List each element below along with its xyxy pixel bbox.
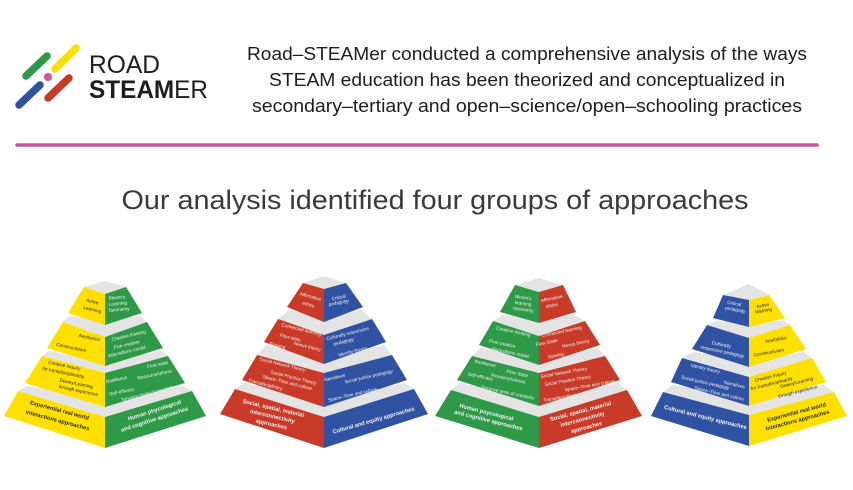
pyramid 4: cultural and experiential: pedagogy (725, 305, 746, 314)
pyramid 2: social and cultural: Narratives (324, 373, 346, 382)
header text block: Road–STEAMer conducted a comprehensive analysis of the ways (247, 44, 807, 64)
pyramid 1: experiential and cognitive: Learning (109, 300, 128, 307)
pyramid 1: experiential and cognitive: Dewey/Learning (59, 378, 94, 390)
pyramid 1: experiential and cognitive: for transdisciplinarity (42, 366, 85, 380)
pyramid 4: cultural and experiential: Social justice pedagogy (681, 375, 731, 391)
pyramid 1: experiential and cognitive: dispositions model (107, 345, 146, 358)
pyramid 1: experiential and cognitive: Learning (83, 305, 102, 314)
pyramid 3: cognitive and social: Resilience (474, 359, 497, 368)
pyramid 2: social and cultural (220, 276, 428, 448)
pyramid 1: experiential and cognitive: Flow state (147, 360, 169, 369)
pyramid 2: social and cultural: Connected learning (281, 322, 322, 337)
pyramid 3: cognitive and social: taxonomy (513, 306, 534, 313)
pyramid 3: cognitive and social: Human psycological (459, 403, 514, 423)
pyramid 2: social and cultural: ethics (302, 301, 316, 309)
section heading: Our analysis identified four groups of approaches (122, 185, 748, 215)
pyramid 1: experiential and cognitive: Active (86, 298, 100, 306)
pyramid 3: cognitive and social: Space–Time and culture (564, 379, 615, 392)
pyramid 2: social and cultural: Culturally responsive (326, 326, 370, 341)
pyramid 2: social and cultural: Space–Time and culture (327, 386, 378, 403)
pyramid 1: experiential and cognitive: Resourcefulness (137, 368, 173, 381)
pyramid 1: experiential and cognitive: Aesthetics (78, 333, 101, 342)
pyramid 3: cognitive and social: ethics (545, 302, 559, 309)
pyramid 2: social and cultural: Flow state (279, 333, 302, 343)
pyramid 1: experiential and cognitive: through experience (58, 384, 99, 397)
pyramid 3: cognitive and social: learning (515, 300, 532, 307)
pyramid 1: experiential and cognitive: Creative thinking (111, 329, 147, 342)
pyramid 3: cognitive and social: Slowing (547, 351, 565, 360)
pyramid 3: cognitive and social: dispositions model (491, 346, 530, 359)
pyramid 4: cultural and experiential: Experiential real world (767, 402, 827, 424)
pyramid 2: social and cultural: Slowing (269, 341, 286, 350)
pyramid 4: cultural and experiential: through experience (778, 384, 818, 399)
pyramid 4: cultural and experiential: Dewey/Learning (780, 376, 814, 389)
pyramid 2: social and cultural: interconnectivity (249, 409, 296, 425)
pyramid 3: cognitive and social: Creative thinking (496, 325, 531, 338)
pyramid 3: cognitive and social: Affirmative (540, 294, 563, 303)
pyramid 3: cognitive and social: Flow State (535, 338, 558, 347)
pyramid 2: social and cultural: Cultural and equity approaches (332, 406, 415, 436)
pyramid 3: cognitive and social: Transdisciplinary (543, 392, 579, 403)
logo: Road STEAMer (19, 48, 208, 105)
pyramid 3: cognitive and social: Resourcefulness (491, 372, 527, 385)
pyramid 3: cognitive and social: Nexus theory (562, 338, 590, 349)
pyramid 3: cognitive and social: Self-efficacy (467, 371, 494, 382)
pyramid 1: experiential and cognitive (4, 281, 206, 448)
pyramid 3: cognitive and social: Flow State (506, 369, 529, 378)
pyramid 3: cognitive and social: Five creative (489, 338, 516, 349)
pyramid 3: cognitive and social: Connected learning (541, 325, 582, 338)
pyramid 4: cultural and experiential: Critical (727, 300, 742, 307)
pyramid 4: cultural and experiential: Culturally (711, 340, 732, 349)
pyramid 3: cognitive and social: Bloom's (515, 294, 532, 301)
logo: Road STEAMer: STEAMER (89, 76, 208, 104)
pyramid 2: social and cultural: Transdisciplinary (248, 378, 284, 391)
pyramid 2: social and cultural: Space–Time and culture (262, 374, 313, 391)
pyramid 4: cultural and experiential: Narratives (723, 380, 746, 390)
pyramid 1: experiential and cognitive: Constructivism (56, 342, 87, 353)
pyramid 2: social and cultural: approaches (255, 419, 287, 432)
pyramid 1: experiential and cognitive: Human phycological (127, 399, 182, 422)
pyramid 2: social and cultural: Social Network Theory (259, 356, 306, 373)
pyramid 1: experiential and cognitive: Resilience (106, 375, 128, 384)
pyramid 1: experiential and cognitive: Creative Inquiry (48, 360, 82, 372)
pyramid 4: cultural and experiential: Space–Time and culture (694, 385, 745, 402)
pyramid 4: cultural and experiential: learning (755, 307, 773, 314)
pyramid 3: cognitive and social: Social Network Theory (540, 366, 588, 379)
pyramid 4: cultural and experiential: Creative Inquiry (754, 370, 788, 383)
pyramid 1: experiential and cognitive: Bloom's (108, 294, 126, 301)
pyramid 4: cultural and experiential: responsive pedagogy (700, 344, 745, 359)
pyramid 1: experiential and cognitive: Self-efficacy (109, 386, 135, 397)
pyramid 1: experiential and cognitive: Torrance tests of creativity (121, 384, 175, 403)
pyramid 3: cognitive and social: and cognitive approaches (453, 410, 523, 432)
header text block: STEAM education has been theorized and conceptualized in (269, 70, 785, 90)
pyramid 2: social and cultural: Social justice pedagogy (344, 368, 394, 385)
pyramid 2: social and cultural: pedagogy (328, 298, 350, 307)
pyramid 1: experiential and cognitive: Experiential real world (29, 400, 90, 422)
pyramid 2: social and cultural: Affirmative (299, 291, 322, 302)
pyramid 4: cultural and experiential: Constructivism (753, 347, 784, 358)
pyramid 4: cultural and experiential: Identity theory (690, 363, 721, 374)
pyramid 1: experiential and cognitive: and cognitive approaches (120, 406, 189, 434)
header text block (247, 44, 807, 116)
header text block: secondary–tertiary and open–science/open–schooling practices (252, 96, 802, 116)
pyramid 3: cognitive and social: Social, spatial, material (550, 401, 612, 423)
pyramid 4: cultural and experiential: Aesthetics (765, 335, 787, 344)
pyramid 1: experiential and cognitive: Five creative (113, 339, 141, 350)
pyramid 2: social and cultural: Social Practice Theory (270, 369, 317, 386)
pyramid 2: social and cultural: Critical (331, 294, 346, 301)
pink divider line (17, 143, 817, 147)
pyramid 4: cultural and experiential: interactions approaches (765, 410, 830, 432)
pyramid 4: cultural and experiential: Active (756, 302, 770, 309)
pyramid 4: cultural and experiential: Cultural and equity approaches (663, 405, 747, 431)
logo: Road STEAMer: ROAD (89, 51, 160, 79)
pyramid 3: cognitive and social: Social Practice Theory (544, 374, 592, 387)
pyramid 2: social and cultural: Identity theory (338, 345, 368, 358)
pyramid 2: social and cultural: pedagogy (333, 336, 355, 346)
pyramid 2: social and cultural: Social, spatial, material (242, 399, 305, 419)
pyramid 4: cultural and experiential (651, 284, 847, 446)
pyramid 3: cognitive and social: approaches (571, 421, 603, 435)
pyramid 3: cognitive and social: interconnectivity (560, 411, 606, 429)
pyramid 3: cognitive and social (435, 278, 642, 448)
pyramid 4: cultural and experiential: for transdisciplinarity (750, 376, 794, 391)
pyramid 1: experiential and cognitive: Taxonomy (108, 306, 130, 313)
pyramid 2: social and cultural: Nexus theory (293, 341, 322, 352)
pyramid 3: cognitive and social: Torrance tests of creativity (480, 384, 535, 401)
pyramid 1: experiential and cognitive: interactions approaches (25, 410, 90, 432)
